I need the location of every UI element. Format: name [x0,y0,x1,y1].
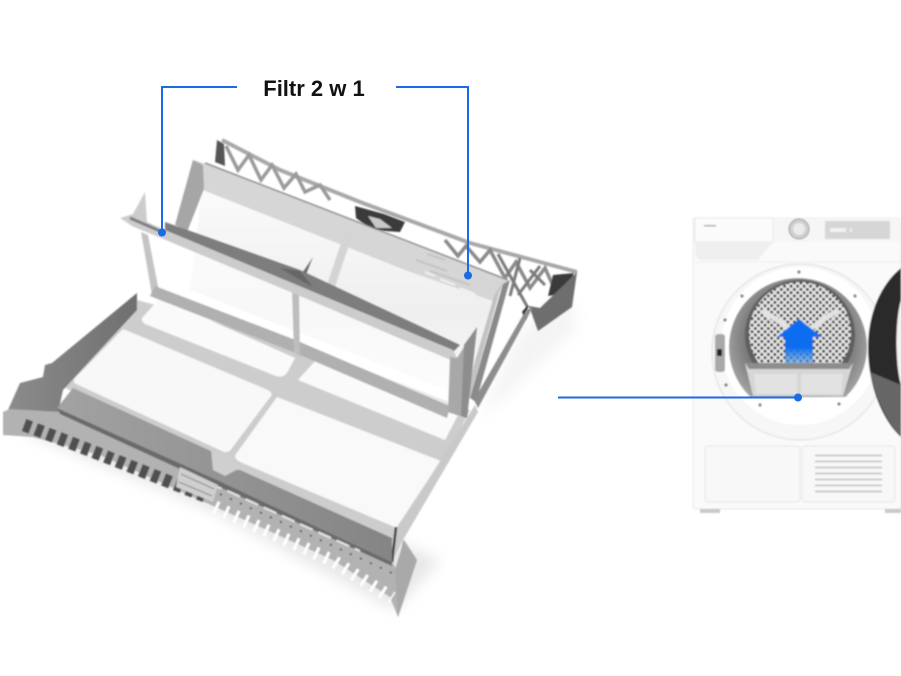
lower panels [705,446,895,502]
dryer illustration [693,218,901,513]
tray floor [60,300,470,545]
detergent drawer [695,218,773,242]
tray shadow [20,420,440,610]
drum mesh [749,282,851,384]
leader dot: right filter [464,272,472,280]
filter in dryer [745,363,853,396]
tray comb edge [3,409,417,617]
control knob [789,219,809,239]
tray panel: front right [235,397,446,528]
drum opening [728,277,868,398]
front filter bottom bar [150,286,450,418]
leader: right filter [396,87,468,275]
tray panel: back right [298,360,458,440]
infographic canvas [2,80,901,617]
right comb notches [215,507,392,598]
dryer feet [700,509,901,513]
front filter mesh [145,232,450,408]
tray panel: front left [74,330,272,452]
lower tray [3,293,478,617]
dryer body [693,218,901,509]
tray front wall [57,388,392,562]
2-in-1 filter illustration [3,140,577,617]
left comb teeth [24,425,205,496]
sensor strip [715,334,725,372]
vent lines [815,456,882,492]
display panel [825,221,890,239]
leader lines [162,87,798,398]
tray left wall [8,293,137,413]
title: Filtr 2 w 1 [263,76,365,101]
back filter frame [175,160,508,301]
back lattice rail [215,140,577,331]
back filter [175,160,533,408]
door ring [712,264,888,440]
leader: dryer location [558,396,798,398]
door ring screws [723,270,857,407]
front filter top bar [165,222,460,352]
drum paddles [762,310,838,330]
dryer control panel [693,218,901,262]
tray handle clip [176,467,218,502]
icon: airflow arrow [777,319,822,363]
front filter [120,192,477,418]
tray right wall [392,405,478,562]
back filter mesh [190,180,495,400]
tray ledge [57,408,392,566]
open door [868,268,901,437]
leader dot: dryer location [794,394,802,402]
front filter center post [292,290,300,357]
front filter right post [448,327,477,418]
leader: left filter [162,87,237,232]
leader dot: left filter [158,228,166,236]
front filter left post [141,232,159,295]
tray panel: back left [142,298,295,377]
